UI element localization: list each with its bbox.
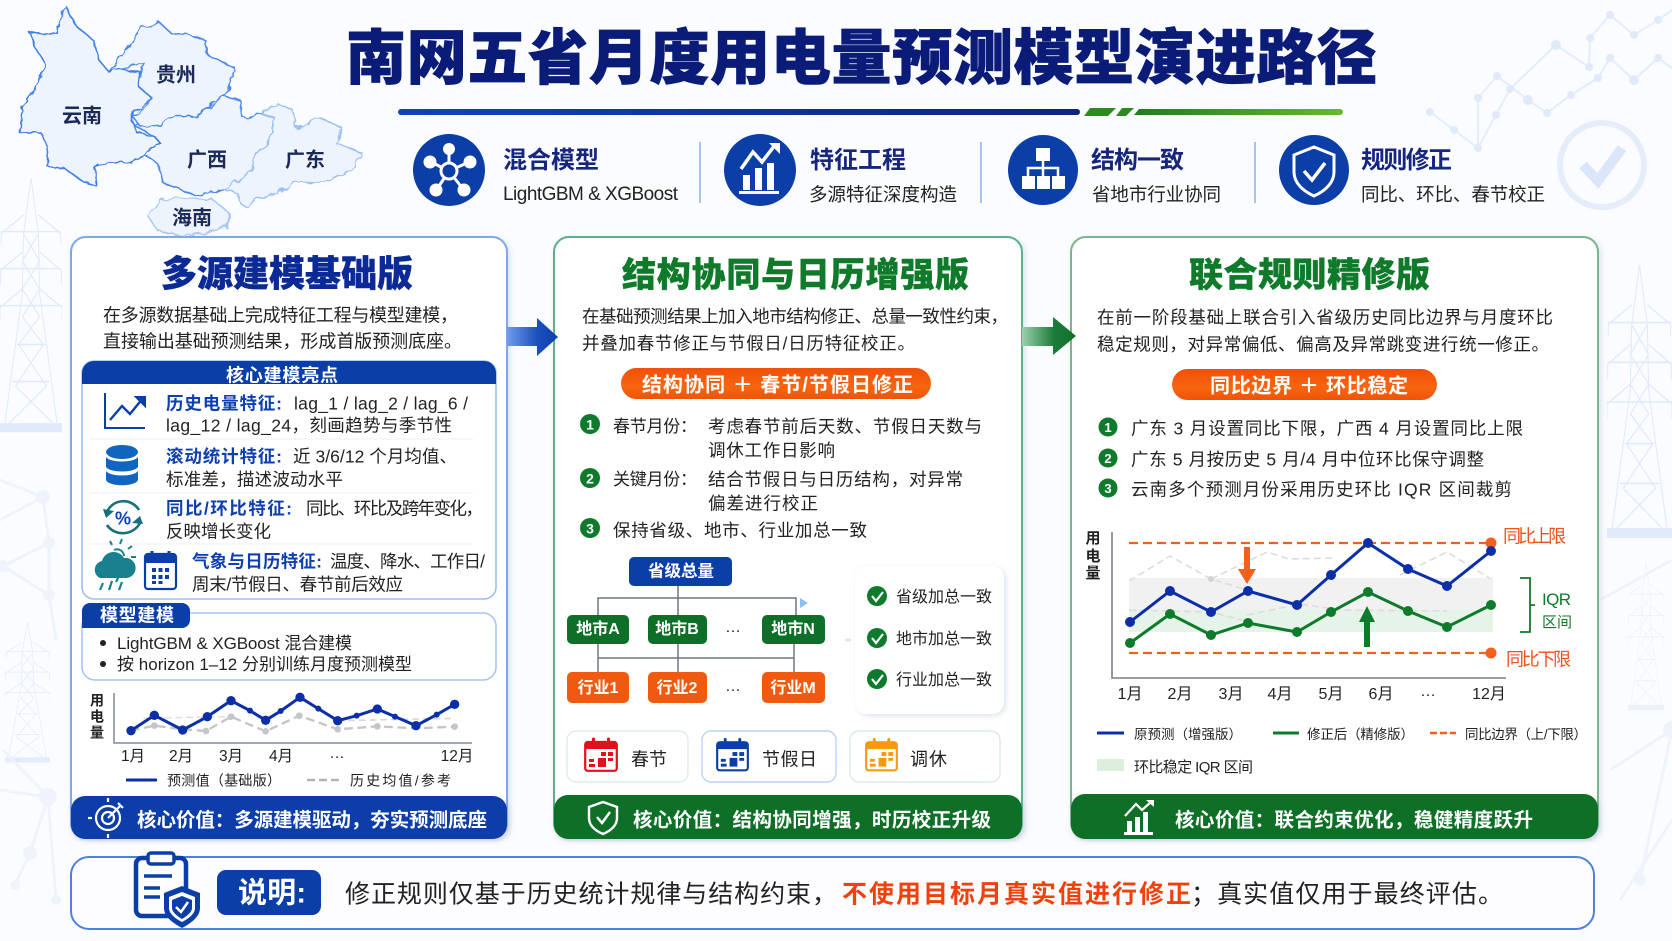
- limit labels: 同比下限: [1506, 649, 1571, 669]
- node: industries: …: [725, 678, 741, 695]
- numbered list: 3: [1104, 481, 1112, 496]
- numbered list: 2: [586, 470, 594, 486]
- x axis labels: …: [329, 745, 345, 762]
- node: cities: 地市B: [655, 619, 699, 638]
- x axis labels: 3月: [1219, 686, 1243, 703]
- note text: 修正规则仅基于历史统计规律与结构约束，: [345, 880, 837, 908]
- tag pill: 同比边界 ＋ 环比稳定: [1210, 373, 1408, 397]
- map labels: 广东: [285, 147, 325, 171]
- note text: 不使用目标月真实值进行修正: [842, 880, 1191, 908]
- row: yoy: 反映增长变化: [166, 521, 271, 541]
- icon: weather: [95, 539, 136, 590]
- numbered list: 关键月份：: [613, 470, 697, 489]
- consistency checklist: 行业加总一致: [896, 671, 992, 689]
- numbered list: 云南多个预测月份采用历史环比 IQR 区间裁剪: [1131, 479, 1512, 499]
- panel: base version: [71, 237, 507, 839]
- panel description: [582, 306, 1008, 353]
- y axis label: 用: [90, 692, 104, 708]
- x axis labels: 12月: [1472, 686, 1506, 703]
- value text: 核心价值：多源建模驱动，夯实预测底座: [137, 808, 487, 831]
- IQR bracket: [1520, 578, 1572, 632]
- x axis labels: 12月: [441, 748, 473, 765]
- x axis labels: 4月: [269, 748, 293, 765]
- numbered list: 1: [586, 416, 594, 432]
- chart legend: 预测值（基础版）: [167, 772, 281, 788]
- node: industries: [567, 672, 825, 703]
- bullets: LightGBM & XGBoost 混合建模: [117, 634, 352, 653]
- icon: shield: [1279, 135, 1349, 205]
- subtext: 多源特征深度构造: [809, 184, 957, 205]
- chart legend: 修正后（精修版）: [1307, 727, 1414, 742]
- feature: structural consistency: [1008, 135, 1221, 205]
- map: five provinces: [20, 7, 362, 237]
- subtext: 同比、环比、春节校正: [1361, 184, 1545, 205]
- box heading: 核心建模亮点: [226, 364, 338, 385]
- node: province: 省级总量: [648, 560, 714, 580]
- consistency checklist: [845, 566, 1004, 714]
- core value bar: [1071, 794, 1598, 839]
- feature: hybrid model: [413, 134, 679, 206]
- subtext: LightGBM & XGBoost: [503, 184, 679, 205]
- panel description: 在基础预测结果上加入地市结构修正、总量一致性约束，: [582, 306, 1008, 326]
- numbered list: 广东 5 月按历史 5 月/4 月中位环比保守调整: [1131, 449, 1484, 469]
- icon: clipboard with shield: [136, 853, 200, 928]
- heading: 特征工程: [810, 147, 906, 174]
- box header: [82, 361, 496, 384]
- IQR bracket: IQR: [1542, 590, 1571, 609]
- row: rolling: [166, 446, 457, 489]
- icon: rising bars: [1124, 800, 1154, 835]
- feature: rule correction: [1279, 135, 1545, 205]
- tag pill: [621, 368, 931, 399]
- series: corrected forecast: [1125, 587, 1496, 648]
- tag pill: 结构协同 ＋ 春节/节假日修正: [642, 373, 913, 396]
- panel description: [1097, 307, 1553, 354]
- numbered list: [580, 414, 982, 540]
- numbered list: 结合节假日与日历结构，对异常: [708, 469, 963, 489]
- heading: 规则修正: [1361, 147, 1452, 174]
- modeling box: [82, 603, 496, 680]
- series: original forecast: [1125, 538, 1496, 627]
- highlights box: [82, 361, 496, 599]
- arrow: base to enhanced: [507, 318, 558, 356]
- bullets: [100, 634, 412, 674]
- box tab: [82, 603, 190, 628]
- icon: line chart: [105, 393, 145, 428]
- hierarchy diagram: [567, 557, 825, 703]
- y axis label: 电: [90, 708, 104, 724]
- arrow: up correction: [1359, 606, 1375, 647]
- title: 南网五省月度用电量预测模型演进路径: [346, 25, 1377, 92]
- row: yoy: 同比/环比特征:: [166, 498, 292, 518]
- numbered list: 春节月份：: [613, 417, 697, 436]
- panel title: 结构协同与日历增强版: [622, 256, 969, 294]
- bullets: 按 horizon 1–12 分别训练月度预测模型: [117, 655, 412, 674]
- tag pill: [1172, 369, 1437, 400]
- row: history: 历史电量特征:: [166, 393, 282, 413]
- row: weather and calendar: 周末/节假日、春节前后效应: [192, 574, 403, 594]
- row: rolling: 滚动统计特征:: [166, 446, 282, 466]
- x axis labels: 1月: [1118, 686, 1142, 703]
- note frame: [71, 857, 1594, 929]
- map labels: 广西: [187, 148, 227, 171]
- chart legend: 历史均值/参考: [350, 772, 451, 788]
- numbered list: [1098, 418, 1523, 499]
- node: industries: 行业1: [578, 679, 619, 697]
- row: history: lag_1 / lag_2 / lag_6 /: [294, 393, 468, 414]
- icon: shield: [589, 802, 617, 834]
- heading: 混合模型: [503, 147, 599, 174]
- panel title: 多源建模基础版: [161, 253, 413, 294]
- x axis labels: 2月: [1168, 686, 1192, 703]
- y axis label: 用: [1085, 530, 1101, 547]
- chart legend: 同比边界（上/下限）: [1465, 727, 1587, 742]
- arrow: enhanced to refined: [1022, 317, 1076, 355]
- row: weather and calendar: 气象与日历特征:: [192, 551, 322, 571]
- panel description: 在多源数据基础上完成特征工程与模型建模，: [103, 305, 458, 325]
- panel frame: [554, 237, 1022, 838]
- numbered list: 保持省级、地市、行业加总一致: [613, 520, 867, 540]
- limit labels: 同比上限: [1503, 526, 1566, 546]
- tab heading: 模型建模: [100, 605, 174, 625]
- consistency checklist: 省级加总一致: [896, 588, 992, 606]
- numbered list: 2: [1104, 451, 1112, 466]
- row: yoy: [166, 498, 483, 541]
- panel description: 在前一阶段基础上联合引入省级历史同比边界与月度环比: [1097, 307, 1553, 327]
- row: history: [166, 393, 468, 436]
- numbered list: 调休工作日影响: [708, 440, 835, 460]
- icon: hierarchy: [1008, 135, 1078, 205]
- y axis label: 电: [1085, 548, 1101, 565]
- x axis labels: 4月: [1268, 686, 1292, 703]
- value text: 核心价值：结构协同增强，时历校正升级: [633, 808, 991, 831]
- consistency checklist: 地市加总一致: [896, 630, 992, 648]
- panel title: 联合规则精修版: [1189, 256, 1430, 294]
- core value bar: [71, 796, 507, 839]
- box frame: [82, 361, 496, 599]
- node: cities: 地市N: [771, 619, 815, 638]
- numbered list: 广东 3 月设置同比下限，广西 4 月设置同比上限: [1131, 418, 1523, 438]
- row: yoy: 同比、环比及跨年变化，: [306, 498, 483, 518]
- y axis label: 量: [1085, 565, 1101, 582]
- subtext: 省地市行业协同: [1092, 184, 1221, 205]
- y axis label: [1085, 530, 1101, 582]
- panel frame: [71, 237, 507, 838]
- chip: holiday: 节假日: [762, 749, 817, 769]
- upper and lower limit lines: [1129, 538, 1496, 658]
- map labels: [62, 63, 325, 229]
- y axis label: [90, 692, 104, 740]
- node: industries: 行业2: [657, 679, 698, 697]
- row: weather and calendar: [192, 551, 485, 594]
- line chart: corrected forecast: [1085, 526, 1587, 776]
- x axis labels: 6月: [1369, 686, 1393, 703]
- icon: target: [88, 798, 123, 838]
- arrow: down correction: [1238, 547, 1256, 584]
- node: cities: [567, 615, 825, 644]
- note text: ；真实值仅用于最终评估。: [1191, 880, 1503, 908]
- note tag: [217, 870, 321, 915]
- icon: database: [106, 445, 138, 485]
- x axis labels: 3月: [219, 748, 243, 765]
- map labels: 海南: [172, 206, 212, 229]
- title underline: [398, 108, 1343, 116]
- node: industries: 行业M: [770, 679, 816, 697]
- box frame: [82, 613, 496, 680]
- chart legend: 环比稳定 IQR 区间: [1134, 759, 1253, 776]
- row: history: lag_12 / lag_24，刻画趋势与季节性: [166, 415, 452, 436]
- map labels: 云南: [62, 104, 102, 127]
- y axis label: 量: [90, 724, 104, 740]
- row: weather and calendar: 温度、降水、工作日/: [330, 551, 485, 571]
- chart legend: [1097, 727, 1587, 776]
- note text: [345, 880, 1503, 908]
- panel: enhanced version: [554, 237, 1022, 839]
- icon: calendar: [145, 551, 176, 589]
- icon: percent cycle: %: [115, 508, 131, 528]
- panel description: 直接输出基础预测结果，形成首版预测底座。: [103, 331, 462, 351]
- icon: rising chart: [724, 134, 796, 206]
- panel description: 并叠加春节修正与节假日/日历特征校正。: [582, 333, 915, 353]
- numbered list: 考虑春节前后天数、节假日天数与: [708, 416, 982, 436]
- chip: adjusted workday: [850, 731, 1000, 782]
- core value bar: [554, 795, 1022, 839]
- feature: feature engineering: [724, 134, 957, 206]
- chip: adjusted workday: 调休: [910, 749, 947, 769]
- x axis labels: [121, 745, 473, 765]
- line chart: base forecast: [90, 692, 473, 788]
- map labels: 贵州: [156, 63, 196, 86]
- panel: refined version: [1071, 237, 1598, 839]
- chip: holiday: [702, 731, 836, 782]
- limit labels: [1503, 526, 1571, 669]
- panel description: [103, 305, 462, 351]
- chart legend: [126, 772, 451, 788]
- chart legend: 原预测（增强版）: [1134, 727, 1242, 742]
- x axis labels: [1118, 683, 1506, 703]
- icon: hub: [413, 134, 485, 206]
- chip: spring festival: 春节: [631, 749, 667, 769]
- note bar: [71, 853, 1594, 929]
- x axis labels: 1月: [121, 748, 145, 765]
- value text: 核心价值：联合约束优化，稳健精度跃升: [1175, 808, 1533, 831]
- row: rolling: 标准差，描述波动水平: [166, 469, 343, 489]
- node: province: [629, 557, 732, 586]
- panel description: 稳定规则，对异常偏低、偏高及异常跳变进行统一修正。: [1097, 334, 1549, 354]
- panel frame: [1071, 237, 1598, 838]
- icon: percent cycle: [103, 501, 143, 533]
- numbered list: 偏差进行校正: [708, 493, 818, 513]
- node: cities: 地市A: [576, 619, 620, 638]
- x axis labels: 5月: [1319, 686, 1343, 703]
- row: rolling: 近 3/6/12 个月均值、: [293, 446, 457, 466]
- numbered list: 3: [586, 520, 594, 536]
- x axis labels: 2月: [169, 748, 193, 765]
- IQR band: [1129, 578, 1493, 632]
- map shapes: [20, 7, 362, 237]
- IQR bracket: 区间: [1542, 614, 1572, 631]
- x axis labels: …: [1420, 683, 1436, 700]
- numbered list: 1: [1104, 420, 1112, 435]
- chip: spring festival: [567, 731, 688, 782]
- node: cities: …: [725, 619, 741, 636]
- note tag: 说明:: [238, 876, 306, 909]
- heading: 结构一致: [1091, 147, 1184, 174]
